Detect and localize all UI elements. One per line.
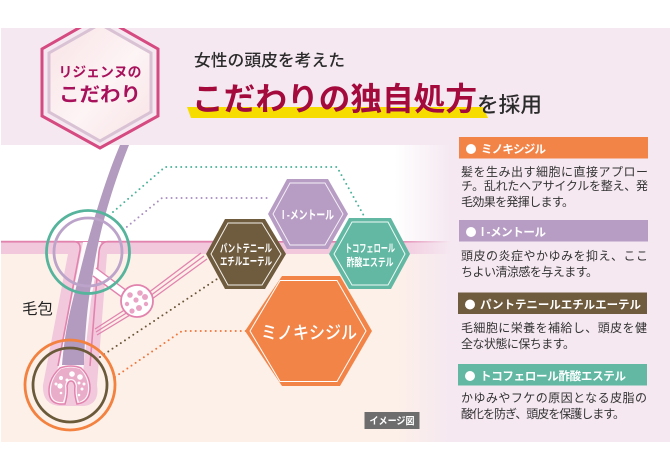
circle: lilac target ring xyxy=(54,218,122,286)
heading: main title: こだわりの独自処方 xyxy=(192,81,477,117)
heading highlight bar xyxy=(187,107,488,118)
hexagon: パントテニールエチルエーテル: エチルエーテル xyxy=(220,255,272,268)
image note badge: イメージ図 xyxy=(370,416,414,428)
dotted connector: orange xyxy=(115,331,246,377)
panel: l-メントール description: ちよい清涼感を与えます。 xyxy=(461,264,598,279)
panel: ミノキシジル description xyxy=(459,137,648,209)
hexagon: トコフェロール酢酸エステル xyxy=(329,218,410,289)
panel: ミノキシジル description: 髪を生み出す細胞に直接アプロー xyxy=(461,164,648,179)
panel: ミノキシジル description: 毛効果を発揮します。 xyxy=(461,195,574,209)
panel: トコフェロール酢酸エステル description: トコフェロール酢酸エステル xyxy=(480,369,626,383)
panel: トコフェロール酢酸エステル description xyxy=(458,364,647,421)
image note badge xyxy=(364,412,420,429)
badge: リジェンヌのこだわり: こだわり xyxy=(59,84,141,106)
hair bulb xyxy=(49,366,90,404)
panel: l-メントール description: l -メントール xyxy=(481,227,546,239)
panel: l-メントール description: 頭皮の炎症やかゆみを抑え、ここ xyxy=(461,249,648,263)
panel: パントテニールエチルエーテル description: パントテニールエチルエーテル xyxy=(480,298,642,312)
panel: パントテニールエチルエーテル description: 全な状態に保ちます。 xyxy=(461,337,575,351)
heading: subtitle: 女性の頭皮を考えた xyxy=(194,51,345,70)
hair follicle illustration xyxy=(1,145,214,406)
hexagon: ミノキシジル xyxy=(245,276,372,386)
panel: ミノキシジル description: チ。乱れたヘアサイクルを整え、発 xyxy=(461,179,648,193)
hexagon: l-メントール: l -メントール xyxy=(282,208,334,222)
hexagon: トコフェロール酢酸エステル: トコフェロール xyxy=(345,243,395,255)
hexagon: ミノキシジル: ミノキシジル xyxy=(261,323,357,343)
panel: パントテニールエチルエーテル description: 毛細胞に栄養を補給し、頭皮を健 xyxy=(461,320,647,335)
dotted connector: lilac xyxy=(123,198,270,230)
hexagon: l-メントール xyxy=(268,179,348,249)
hexagon: パントテニールエチルエーテル xyxy=(206,219,286,289)
dotted connector: teal xyxy=(113,167,364,216)
dotted connector: brown xyxy=(100,277,220,357)
panel: l-メントール description xyxy=(459,220,648,279)
hair shaft xyxy=(62,145,129,365)
badge: リジェンヌのこだわり: リジェンヌの xyxy=(58,64,142,80)
hexagon: トコフェロール酢酸エステル: 酢酸エステル xyxy=(346,255,394,269)
label: 毛包: 毛包 xyxy=(22,300,53,318)
badge: リジェンヌのこだわり xyxy=(42,16,158,148)
circle: teal target ring xyxy=(46,210,130,294)
circle: orange target ring xyxy=(25,340,115,430)
panel: hair diagram background xyxy=(1,145,451,442)
panel: トコフェロール酢酸エステル description: 酸化を防ぎ、頭皮を保護します。 xyxy=(461,406,625,421)
heading: suffix: を採用 xyxy=(477,94,542,117)
panel: ミノキシジル description: ミノキシジル xyxy=(481,143,546,156)
circle: brown target ring xyxy=(33,348,107,422)
sebaceous gland xyxy=(93,253,207,335)
panel: トコフェロール酢酸エステル description: かゆみやフケの原因となる皮脂の xyxy=(461,390,647,405)
panel: パントテニールエチルエーテル description xyxy=(458,292,647,351)
hexagon: パントテニールエチルエーテル: パントテニール xyxy=(220,242,272,255)
